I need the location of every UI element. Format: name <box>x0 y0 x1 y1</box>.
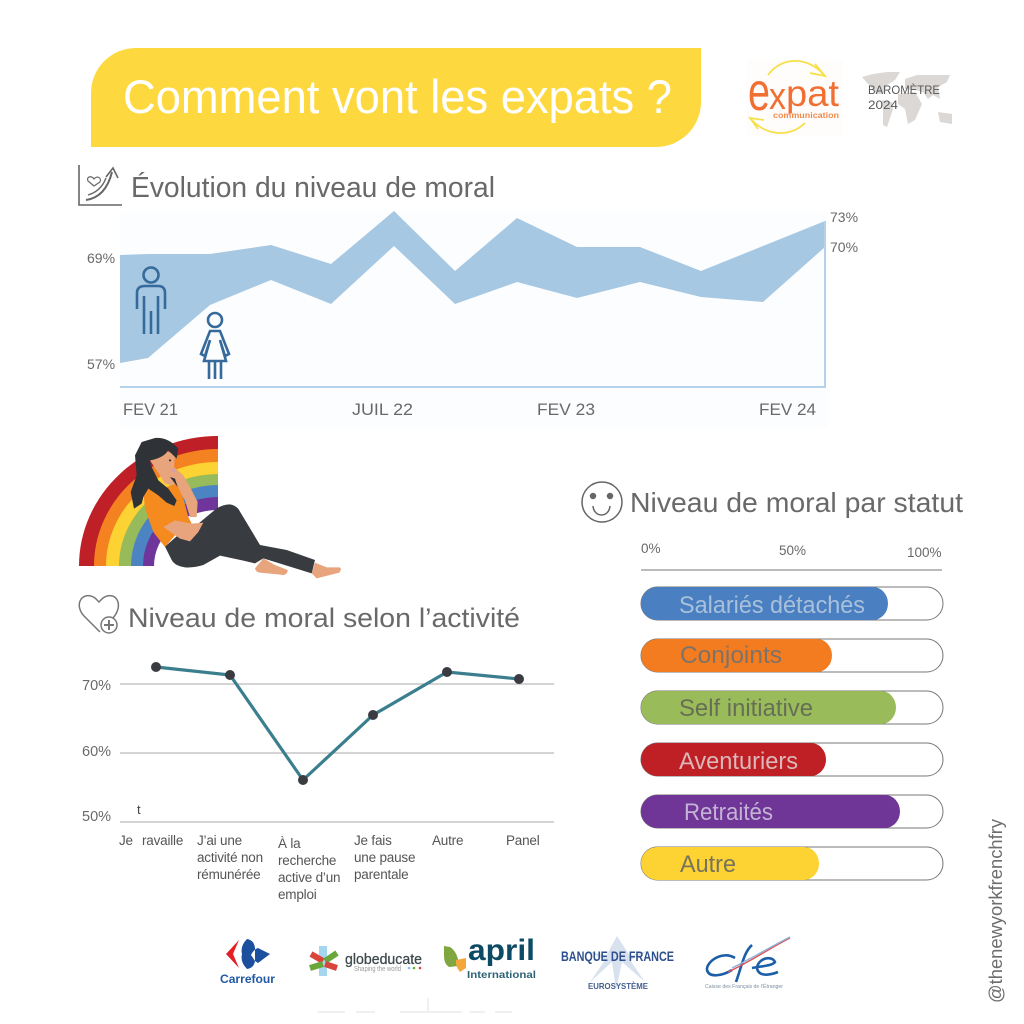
logo: CFE: Caisse des Français de l’Étranger <box>705 983 783 990</box>
bar: Autre <box>641 847 943 880</box>
vertical handle text: @thenewyorkfrenchfry <box>986 819 1006 1003</box>
illustration: woman leaning on rainbow <box>79 436 341 578</box>
bar: Salariés détachés <box>641 587 943 620</box>
label: FEV 23: FEV 23 <box>537 401 595 419</box>
category labels: Panel <box>506 833 540 848</box>
logo: expat communication: pat <box>786 73 840 114</box>
line chart: moral by activity <box>82 662 554 902</box>
label: JUIL 22: JUIL 22 <box>352 401 413 419</box>
category labels: parentale <box>354 867 408 882</box>
label: 57%: 57% <box>87 356 115 372</box>
heading: évolution du niveau de moral <box>79 165 495 205</box>
label: 73%: 73% <box>830 209 858 225</box>
data line <box>156 667 519 780</box>
label: FEV 21: FEV 21 <box>123 401 178 419</box>
logo: expat communication: communication <box>773 110 839 120</box>
logo: expat communication: x <box>769 76 786 118</box>
heading: niveau de moral par statut <box>582 482 963 522</box>
label: FEV 24: FEV 24 <box>759 401 816 419</box>
category labels: J’ai une <box>197 833 242 848</box>
category labels: recherche <box>278 853 336 868</box>
logo: April International <box>444 934 536 981</box>
axis labels: 50% <box>82 809 111 825</box>
category labels: Je fais <box>354 833 392 848</box>
bar: Retraités <box>641 795 943 828</box>
icon: man <box>137 268 165 334</box>
logo: Banque de France: EUROSYSTÈME <box>588 981 648 991</box>
icon: heart with plus <box>79 596 118 633</box>
scale labels: 0% <box>641 541 661 556</box>
icon: woman <box>201 313 229 379</box>
logo: globeducate: Shaping the world <box>354 966 401 973</box>
logo: baromètre 2024 world map: 2024 <box>868 98 898 112</box>
category labels: active d’un <box>278 870 340 885</box>
bar: Aventuriers <box>641 743 943 776</box>
bar: Self initiative <box>641 691 943 724</box>
category labels: ravaille <box>142 833 183 848</box>
logo: expat communication: e <box>748 62 770 122</box>
woman upper body <box>131 438 203 547</box>
bar: Conjoints: Conjoints <box>680 642 782 669</box>
area chart: moral evolution <box>87 209 858 428</box>
category labels: À la <box>278 836 301 851</box>
category labels: Je <box>119 833 133 848</box>
label: 70%: 70% <box>830 239 858 255</box>
logo: Carrefour <box>220 939 276 986</box>
axis labels: 70% <box>82 678 111 694</box>
category labels: une pause <box>354 850 415 865</box>
heading: niveau de moral selon l'activité <box>79 596 520 633</box>
data points <box>151 662 524 785</box>
faint cropped text at the bottom edge <box>318 998 512 1012</box>
bar: Conjoints <box>641 639 943 672</box>
heading: niveau de moral par statut: Niveau de moral par statut <box>630 487 963 518</box>
scale labels: 100% <box>907 545 942 560</box>
logo: globeducate <box>310 946 422 976</box>
scale labels: 50% <box>779 543 806 558</box>
heading: niveau de moral selon l'activité: Niveau de moral selon l’activité <box>128 603 520 633</box>
logo: April International: april <box>468 934 535 967</box>
category labels: activité non <box>197 850 263 865</box>
category labels <box>119 833 540 902</box>
heading: évolution du niveau de moral: Évolution du niveau de moral <box>131 171 495 204</box>
axis labels <box>82 678 111 825</box>
title banner: Comment vont les expats ? <box>123 70 672 123</box>
logo: Banque de France <box>561 936 674 991</box>
logo: CFE <box>705 937 790 990</box>
bar: Aventuriers: Aventuriers <box>679 748 798 775</box>
logo: April International: International <box>467 969 536 981</box>
logo: baromètre 2024 world map: BAROMÈTRE <box>868 82 940 97</box>
logo: expat communication <box>747 60 843 136</box>
logo: globeducate: globeducate <box>345 951 422 968</box>
bar chart: moral by status <box>641 541 943 880</box>
icon: smiley <box>582 482 622 522</box>
category labels: Autre <box>432 833 463 848</box>
logo: Carrefour: Carrefour <box>220 974 276 986</box>
bar: Salariés détachés: Salariés détachés <box>679 592 865 619</box>
scale labels <box>641 541 942 560</box>
woman legs and feet <box>165 504 341 578</box>
title banner <box>91 48 701 147</box>
logo: baromètre 2024 world map <box>862 72 952 127</box>
category labels: emploi <box>278 887 317 902</box>
category labels: rémunérée <box>197 867 260 882</box>
line chart: moral by activity: t <box>137 802 141 817</box>
rainbow <box>79 436 218 566</box>
axis labels: 60% <box>82 744 111 760</box>
bar: Retraités: Retraités <box>684 799 773 826</box>
bar: Self initiative: Self initiative <box>679 695 813 722</box>
icon: rising arrow with heart <box>79 165 122 205</box>
bar: Autre: Autre <box>680 851 736 878</box>
logo: Banque de France: BANQUE DE FRANCE <box>561 949 674 964</box>
label: 69%: 69% <box>87 250 115 266</box>
